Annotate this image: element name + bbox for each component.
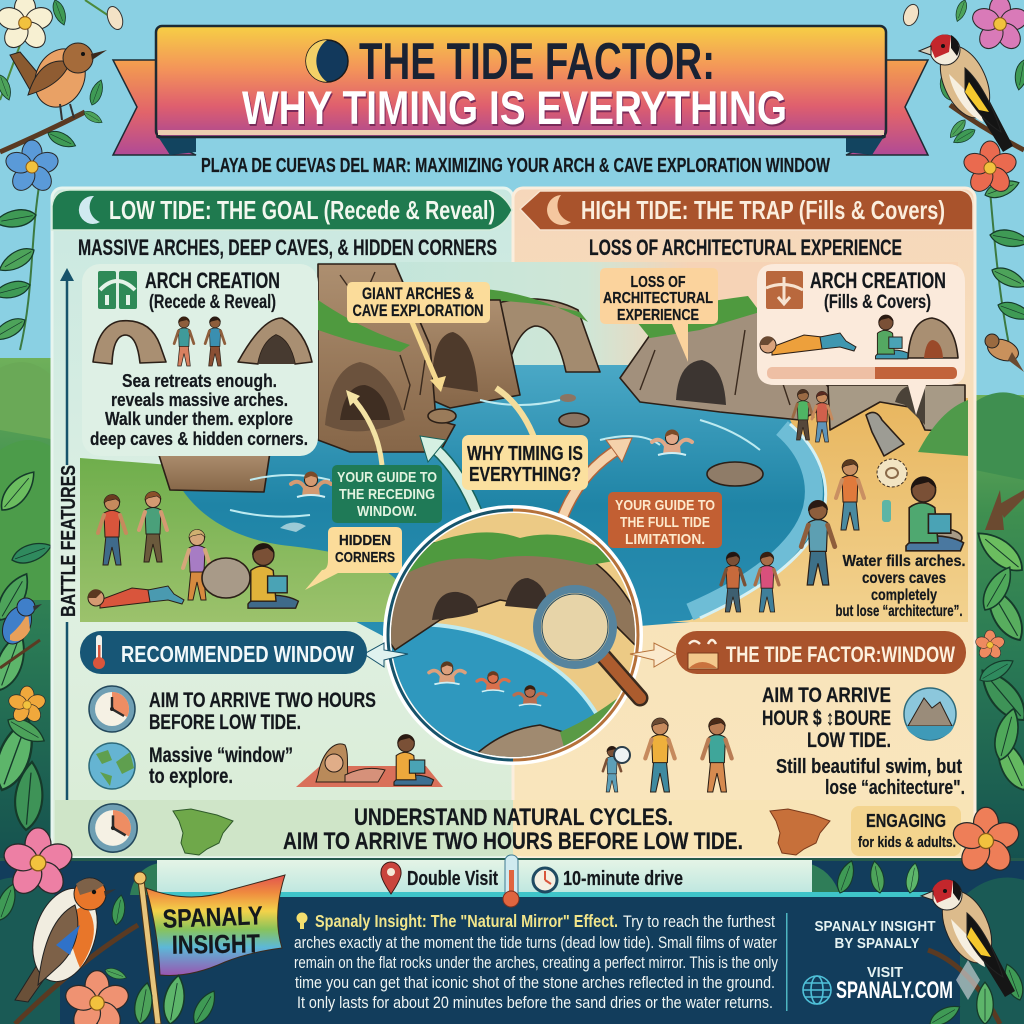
sea rocks [559,413,589,427]
title banner: WHY TIMING IS EVERYTHING [242,81,787,134]
text: massive window [149,744,293,788]
text: still beautiful: Still beautiful swim, but [776,756,962,778]
subheading: low tide: MASSIVE ARCHES, DEEP CAVES, & HIDDEN CORNERS [78,235,497,260]
pill: recommended window [80,631,367,674]
badge: high tide header [520,190,973,230]
pill: tide factor window [676,631,966,674]
insight text [294,911,778,1012]
arrow: circle to tide factor window [630,643,676,667]
icon: globe [89,743,135,789]
arrow: circle to recommended window [364,643,408,667]
walkers [174,317,225,366]
bird: goldfinch [919,35,1013,152]
subheading: high tide: LOSS OF ARCHITECTURAL EXPERIENCE [589,235,902,260]
callout: giant arches: CAVE EXPLORATION [352,302,484,320]
cliff: main left [318,264,455,452]
icon: stopwatch [533,868,557,892]
callout: loss of architectural experience: ARCHITECTURAL [603,290,713,307]
circle cliff [388,541,640,650]
callout: why timing: EVERYTHING? [469,464,581,486]
reading person [876,315,910,359]
callout: hidden corners [305,527,402,590]
circle swimmers [429,661,465,684]
icon: thermometer [503,855,519,907]
icon: stone arch [93,321,166,364]
title banner [113,26,928,155]
callout: why timing: WHY TIMING IS [467,443,583,465]
bottle [882,500,891,522]
callout: guide to receding window [332,465,442,523]
brand block: BY SPANALY [834,935,920,952]
band: quick facts: 10-minute drive [563,868,683,890]
summary text [283,804,743,855]
callout: engaging: for kids & adults. [858,834,956,851]
text: aim to arrive: AIM TO ARRIVE TWO HOURS [149,689,376,712]
high tide caption: completely [871,587,937,604]
icon: clock strip [89,804,137,852]
title banner: THE TIDE FACTOR: [359,33,715,91]
flower: small orange right [974,630,1006,660]
flag: spanaly insight: SPANALY [162,900,263,934]
icon: covered cave [908,318,958,358]
footer background [0,858,1024,1024]
back rocks on beach [828,385,965,432]
insight text: time you can get that iconic shot of the stone arches reflected in the ground. [295,973,775,992]
cliff: right side [620,310,840,420]
top right flora and goldfinch [901,0,1024,196]
brand block: VISIT [867,964,903,981]
insight text: arches exactly at the moment the tide turns (dead low tide). Small films of water [294,933,777,952]
dolphin [280,522,306,532]
badge: low tide header [52,190,512,230]
central magnified circle [383,505,643,770]
swimmer right [652,429,692,455]
brand block: SPANALY INSIGHT [814,918,936,935]
circle foreground rock [478,724,581,757]
icon: arch creation split [98,271,137,309]
high tide caption [836,553,966,620]
man reading map [801,500,835,585]
flower: pink left [1,828,75,899]
callout: giant arches: GIANT ARCHES & [362,285,474,303]
callout: guide to full tide [608,492,722,548]
icon: thermometer [93,635,105,669]
sparkle mark [956,960,980,1000]
callout: hidden corners: CORNERS [335,549,395,566]
sea [160,365,830,645]
reclining adult [88,586,184,608]
panel: arch creation high tide [757,264,965,415]
text: high tide aim: HOUR $ ↕BOURE [762,707,891,730]
callout: guide to receding window: YOUR GUIDE TO [337,469,437,486]
picnic scene [296,734,443,787]
high tide caption: Water fills arches. [842,553,966,570]
callout: guide to full tide: YOUR GUIDE TO [615,497,715,514]
vertical axis: battle features [58,268,80,851]
arrow: guide to receding [427,442,478,515]
ribbon tails [113,60,928,155]
text: still beautiful [776,756,965,799]
summary text: AIM TO ARRIVE TWO HOURS BEFORE LOW TIDE. [283,828,743,855]
hikers [98,494,126,565]
icon: crescent moon [79,196,100,224]
callout: loss of architectural experience [600,268,718,362]
icon: light bulb [296,912,308,929]
text: high tide aim [762,684,891,752]
arrow: to arch [496,388,535,440]
arch rock: far arch [480,299,600,380]
flower: orange right [950,807,1022,876]
icon: map pin [381,862,401,894]
shell fossil [877,459,907,487]
family group [603,718,732,792]
rock below arch box [158,452,270,492]
band: quick facts [150,855,950,907]
flag: spanaly insight: INSIGHT [172,928,260,960]
callout: guide to receding window: THE RECEDING [339,486,435,503]
divider [786,913,788,1011]
text: high tide aim: AIM TO ARRIVE [762,684,891,707]
panel: arch creation high tide: ARCH CREATION [810,268,946,293]
text: massive window: to explore. [149,765,233,788]
arrow: to cave [350,395,382,465]
kid with shell [836,459,864,530]
map: spain orange [770,809,830,855]
arrows in scene [346,322,632,530]
callout: hidden corners: HIDDEN [339,532,391,549]
insight text: remain on the flat rocks under the arches, creating a perfect mirror. This is the only [294,953,778,972]
icon: crescent moon [547,195,571,225]
vertical axis: battle features: BATTLE FEATURES [58,465,80,617]
brand block [803,918,953,1004]
insight text: It only lasts for about 20 minutes before the sand dries or the water returns. [297,993,773,1012]
text: aim to arrive: BEFORE LOW TIDE. [149,711,301,734]
callout: loss of architectural experience: LOSS OF [630,274,686,291]
text: high tide aim: LOW TIDE. [807,729,891,752]
icon: magnifying glass [537,589,640,698]
panel: high tide background [513,188,975,858]
high tide caption: covers caves [862,570,946,587]
badge: low tide header: LOW TIDE: THE GOAL (Recede & Reveal) [109,195,495,225]
panel: arch creation low tide: ARCH CREATION [145,268,280,293]
panel: arch creation low tide [82,264,318,456]
bottom right flora and goldfinch [834,859,1024,1024]
top left flora and wren [0,0,126,195]
callout: guide to full tide: THE FULL TIDE [620,514,710,531]
brand block: SPANALY.COM [836,977,953,1004]
lower panel strips [55,800,973,856]
icon: web globe [803,976,831,1004]
icon: mountain circle [904,688,956,740]
flag: spanaly insight [134,872,285,1024]
map: spain green [173,809,233,855]
right jungle side [968,392,1024,868]
bird: wren [10,41,107,120]
icon: fills and covers [766,271,803,309]
cliff: middle cave rock [415,300,520,408]
callout: why timing [462,435,588,490]
high tide caption: but lose “architecture”. [836,603,962,620]
bird: bluebird left [0,598,42,668]
arch creation body text: Sea retreats enough. [122,371,277,391]
callout: engaging [851,806,961,856]
banner body [156,26,886,137]
swimmer [291,471,331,497]
pill: tide factor window: THE TIDE FACTOR:WINDOW [726,642,955,667]
foliage along upper sides [0,176,1024,350]
pill: recommended window: RECOMMENDED WINDOW [121,641,354,667]
summary text: UNDERSTAND NATURAL CYCLES. [354,804,673,831]
icon: cave [238,318,312,364]
callout: guide to full tide: LIMITATION. [625,531,705,548]
icon: clock [89,686,135,732]
arch creation body text: Walk under them. explore [105,409,293,429]
icon: moon [306,40,348,82]
main panel [52,188,975,858]
icon: tide window [688,640,718,669]
sitting person on rock [914,528,962,548]
arrow: guide to full tide [558,448,620,530]
beach couple [793,389,813,440]
reclining person [760,333,856,355]
tide bar [767,367,957,379]
bird: robin [15,878,116,1002]
insight text: Try to reach the furthest [623,912,775,931]
left jungle side [0,358,56,868]
bottom left flora [0,878,220,1024]
arch creation body text: reveals massive arches. [111,390,288,410]
sandy beach [670,398,968,622]
bird: goldfinch [921,880,1015,997]
bird: small brown right [985,334,1024,372]
callout: loss of architectural experience: EXPERIENCE [617,307,699,324]
callout: engaging: ENGAGING [866,811,946,831]
coastal scene [80,262,968,645]
flower: yellow left [7,686,47,724]
water ripples [230,400,760,517]
panel: arch creation low tide: (Recede & Reveal) [149,292,276,313]
panel: arch creation high tide: (Fills & Covers) [824,292,931,313]
insight text: Spanaly Insight: The "Natural Mirror" Effect. [315,911,618,931]
callout: guide to receding window: WINDOW. [357,503,417,520]
grassy shore [80,458,398,622]
panel: low tide background [52,188,513,858]
text: massive window: Massive “window” [149,744,293,767]
band: quick facts: Double Visit [407,868,498,890]
arch creation body text [90,371,308,449]
callout: giant arches [347,282,490,323]
arrow: to giant arches [412,322,438,384]
arch creation body text: deep caves & hidden corners. [90,429,308,449]
scene people [88,389,964,612]
rock creature [866,412,904,456]
text: still beautiful: lose “achitecture". [825,777,965,799]
couple holding hands [721,552,745,612]
reader on rock [202,558,250,598]
text: aim to arrive [149,689,376,734]
circle water [388,624,600,765]
